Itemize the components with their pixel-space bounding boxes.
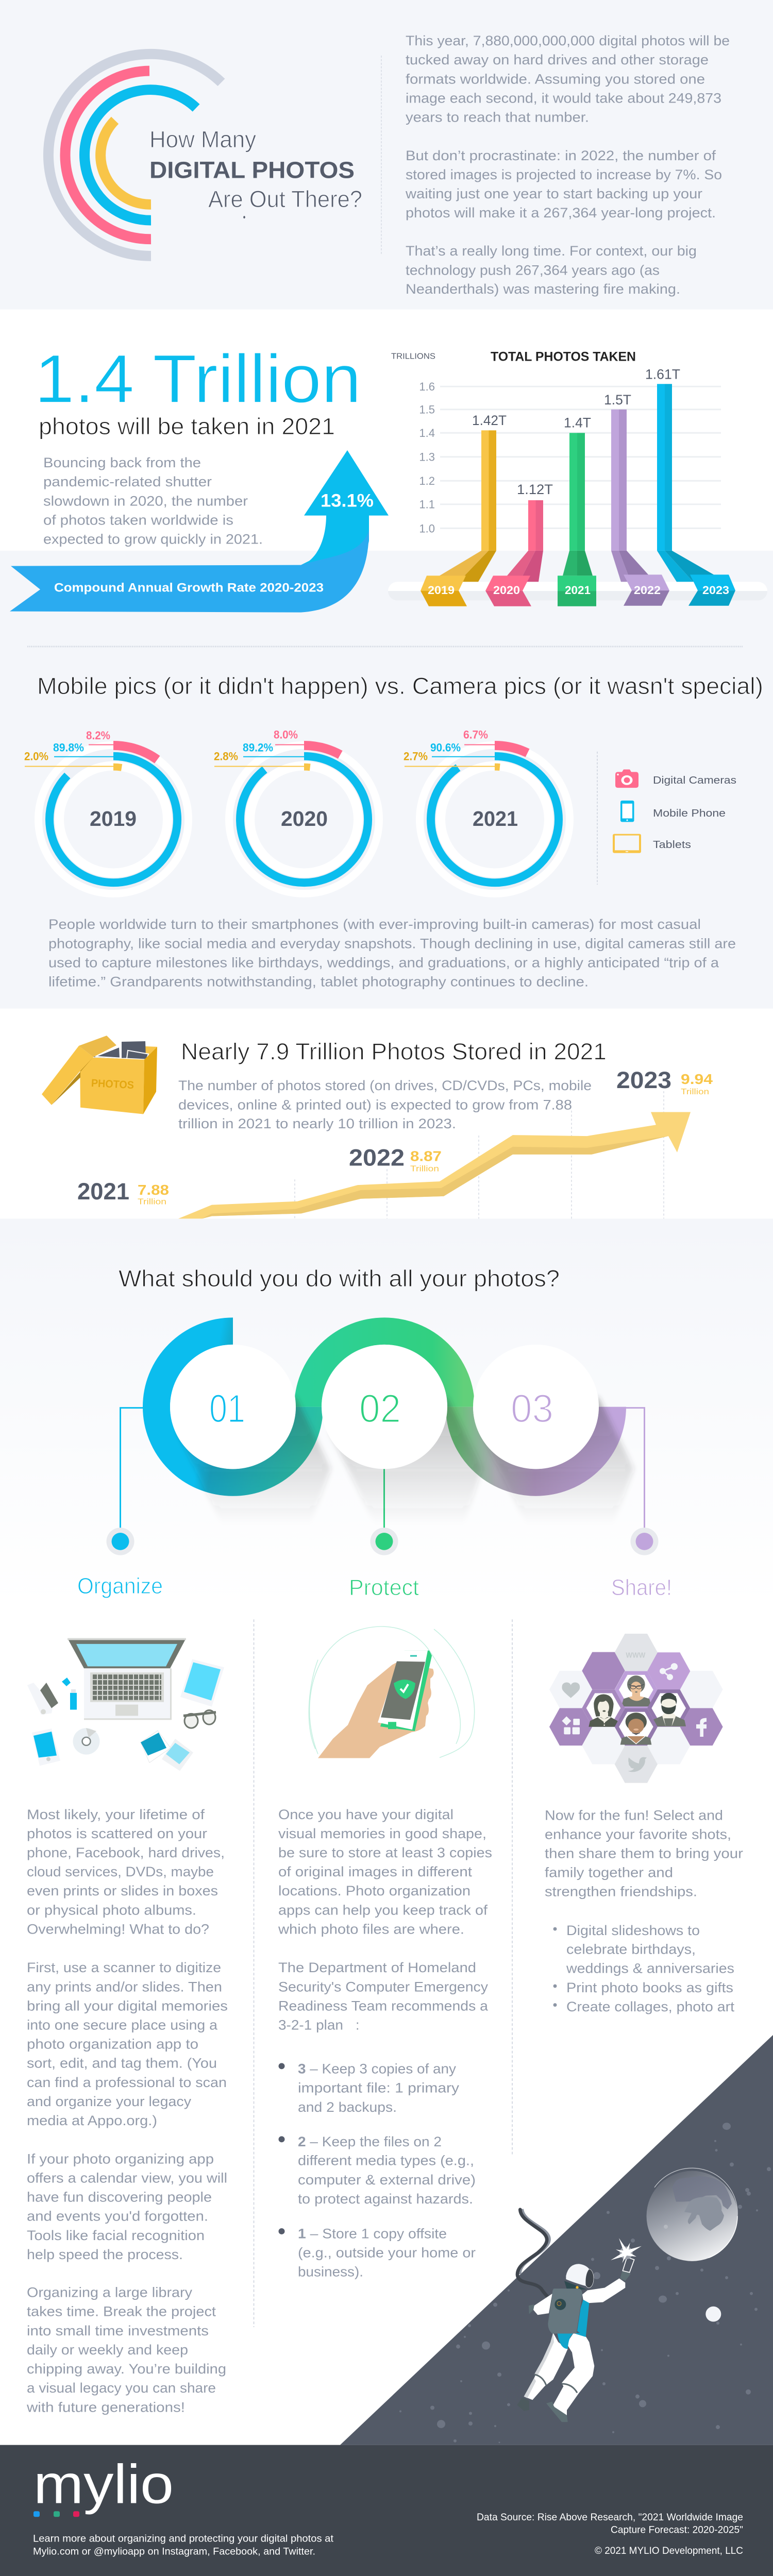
bar chart: total photos taken: TOTAL PHOTOS TAKEN (491, 350, 636, 364)
text block: organize: into one secure place using a (27, 2018, 217, 2032)
text block: protect: 3-2-1 plan (278, 2018, 343, 2032)
person: man center (615, 1708, 658, 1745)
text block: stored: devices, online & printed out) is expected to grow from 7.88 (178, 1097, 572, 1113)
text block: protect: of original images in different (278, 1864, 473, 1879)
hand (318, 1662, 434, 1758)
text block: intro paragraphs: technology push 267,364 years ago (as (406, 263, 660, 278)
icon: share hexagons (549, 1634, 723, 1783)
hex icons (562, 1652, 707, 1772)
bullet list: share ideas (553, 1923, 735, 2014)
text block: organize: or physical photo albums. (27, 1902, 196, 1918)
text block: share: then share them to bring your (545, 1846, 743, 1861)
text block: protect: visual memories in good shape, (278, 1826, 486, 1841)
text block: protect: The Department of Homeland (278, 1960, 476, 1975)
text block: rebound: of photos taken worldwide is (43, 513, 233, 528)
text block: organize: daily or weekly and keep (27, 2342, 188, 2358)
donut chart: 2021: 90.6% (430, 741, 461, 754)
bar chart: total photos taken: 1.1 (419, 498, 435, 511)
bar chart: total photos taken (388, 350, 767, 606)
bullet list: share ideas: Create collages, photo art (566, 1999, 735, 2014)
photo prints (141, 1731, 193, 1771)
bar chart: total photos taken: TRILLIONS (391, 352, 435, 361)
text block: share: family together and (545, 1865, 673, 1880)
label: 2023 value: 9.94 (681, 1071, 713, 1087)
panel: photos stored (42, 1036, 713, 1218)
bar: 2021: 1.4T (564, 415, 591, 430)
text block: organize: offers a calendar view, you will (27, 2171, 227, 2185)
text block: organize: takes time. Break the project (27, 2304, 216, 2319)
callout: 13.1 percent: 13.1% (321, 490, 374, 511)
text block: intro paragraphs: But don’t procrastinate: in 2022, the number of (406, 148, 716, 163)
text block: protect (278, 1807, 492, 2280)
text block: organize: Most likely, your lifetime of (27, 1807, 205, 1822)
bullet list: 3-2-1 plan: to protect against hazards. (298, 2191, 473, 2207)
icon: concentric arcs (48, 54, 221, 256)
text block: intro paragraphs: Neanderthals) was mastering fire making. (406, 281, 680, 297)
person: man with beard (647, 1689, 690, 1727)
bar: 2022: 2022 (634, 584, 661, 597)
bar: 2019 (421, 413, 507, 606)
footer (0, 2445, 773, 2576)
title: how many digital photos: How Many (149, 126, 256, 152)
label: 2021 value: 7.88 (138, 1182, 169, 1198)
text block: organize: into small time investments (27, 2323, 209, 2338)
bar chart: total photos taken: 1.5 (419, 403, 435, 416)
text block: protect: Once you have your digital (278, 1807, 453, 1822)
bar: 2019: 2019 (428, 584, 455, 597)
icon: camera (615, 769, 638, 788)
step 02 (322, 1345, 447, 1469)
heading: 1.4 trillion: 1.4 Trillion (35, 341, 361, 417)
text block: data source: Data Source: Rise Above Research, "2021 Worldwide Image (477, 2512, 743, 2523)
text block: organize: cloud services, DVDs, maybe (27, 1864, 214, 1879)
person: woman with glasses (615, 1671, 658, 1708)
legend: Tablets (653, 839, 691, 851)
heading: mobile vs camera: Mobile pics (or it didn't happen) vs. Camera pics (or it wasn't special) (37, 673, 763, 699)
icon: photo box: PHOTOS (91, 1077, 135, 1091)
text block: organize: First, use a scanner to digitize (27, 1960, 221, 1975)
bullet list: 3-2-1 plan: computer & external drive) (298, 2172, 476, 2188)
bar: 2020 (485, 482, 553, 606)
phone and flash (611, 2238, 642, 2273)
label: 2022 value: 2022 (349, 1145, 405, 1171)
legend: Mobile Phone (653, 807, 726, 819)
bullet list: 3-2-1 plan: important file: 1 primary (298, 2080, 460, 2096)
bullet list: 3-2-1 plan: 1 – Store 1 copy offsite (298, 2226, 447, 2241)
bullet list: 3-2-1 plan: different media types (e.g., (298, 2153, 474, 2168)
text block: organize: with future generations! (26, 2399, 185, 2415)
text block: rebound: slowdown in 2020, the number (43, 493, 248, 509)
phone (378, 1651, 432, 1731)
bar: 2022 (604, 392, 669, 606)
panel: intro header (48, 33, 730, 297)
heading: nearly 7.9 trillion: Nearly 7.9 Trillion Photos Stored in 2021 (181, 1039, 607, 1065)
donut chart: 2021: 2.7% (404, 750, 428, 763)
text block: mobile vs camera: photography, like social media and everyday snapshots. Though declining in use, digital cameras still are (48, 936, 736, 951)
arrow: growth (178, 1112, 691, 1218)
label: 2021 value (77, 1178, 169, 1207)
stars (399, 2123, 771, 2443)
text block: organize (26, 1807, 228, 2415)
text block: intro paragraphs: tucked away on hard drives and other storage (406, 52, 709, 67)
bar chart: total photos taken: 1.4 (419, 427, 435, 439)
label: 2022 value: Trillion (410, 1164, 439, 1173)
circle shadows (178, 1397, 634, 1524)
label: 2023 value (616, 1067, 713, 1096)
bullet list: 3-2-1 plan: 3 – Keep 3 copies of any (298, 2061, 457, 2077)
bar: 2023: 1.61T (645, 366, 680, 382)
text block: share: strengthen friendships. (545, 1884, 697, 1900)
text block: share: Now for the fun! Select and (545, 1807, 723, 1823)
panel: what should you do (77, 1265, 672, 1600)
text block: stored (178, 1078, 592, 1131)
text block: rebound: pandemic-related shutter (43, 474, 212, 489)
icon: photo box (42, 1036, 157, 1114)
text block: intro paragraphs: This year, 7,880,000,000,000 digital photos will be (406, 33, 730, 48)
bar: 2021 (558, 415, 596, 606)
text block: learn more: Mylio.com or @mylioapp on Instagram, Facebook, and Twitter. (33, 2546, 315, 2557)
donut chart: 2021: 6.7% (463, 728, 488, 741)
bar: 2020: 2020 (493, 584, 520, 597)
icon: protect phone (309, 1626, 475, 1758)
label: 2023 value: 2023 (616, 1067, 671, 1093)
text block: organize: a visual legacy you can share (27, 2380, 216, 2396)
text block: organize: sort, edit, and tag them. (You (27, 2056, 217, 2071)
bullet list: 3-2-1 plan: and 2 backups. (298, 2099, 397, 2115)
step 02: 02 (359, 1387, 401, 1431)
text block: data source: © 2021 MYLIO Development, LLC (595, 2545, 743, 2556)
text block: mobile vs camera: used to capture milestones like birthdays, weddings, and graduations, or a highly anticipated “trip of a (48, 955, 719, 970)
bar: 2020: 1.12T (517, 482, 553, 497)
helmet (564, 2281, 586, 2290)
donut chart: 2021: 2021 (473, 807, 518, 831)
backpack (548, 2289, 582, 2334)
connectors and dots (121, 1408, 644, 1535)
step 03: 03 (511, 1387, 553, 1431)
person: woman dark hair (582, 1689, 625, 1727)
illustration: space triangle (340, 2035, 773, 2445)
bar: 2021: 2021 (565, 584, 591, 597)
logo: mylio: mylio (33, 2453, 174, 2515)
donut chart: 2019: 8.2% (86, 729, 110, 742)
shield arcs (309, 1626, 475, 1758)
bar: 2023: 2023 (702, 584, 729, 597)
donut chart: 2019: 2019 (90, 807, 137, 831)
text block: intro paragraphs: image each second, it would take about 249,873 (406, 91, 721, 106)
bullet list: share ideas: Print photo books as gifts (566, 1980, 733, 1995)
phone (32, 1728, 60, 1766)
text block: organize: Organizing a large library (27, 2285, 193, 2300)
tablet (180, 1659, 224, 1707)
text block: learn more: Learn more about organizing and protecting your digital photos at (33, 2533, 333, 2545)
text block: data source (477, 2512, 743, 2556)
label: 2021 value: 2021 (77, 1178, 129, 1205)
text block: share: enhance your favorite shots, (545, 1827, 731, 1842)
text block: intro paragraphs: stored images is projected to increase by 7%. So (406, 167, 722, 182)
text block: rebound (43, 455, 263, 547)
text block: intro paragraphs: waiting just one year to start backing up your (405, 186, 702, 201)
text block: organize: and events you'd forgotten. (27, 2209, 208, 2224)
text block: organize: and organize your legacy (27, 2094, 192, 2109)
text block: organize: media at Appo.org.) (27, 2113, 157, 2128)
text block: organize: even prints or slides in boxes (27, 1883, 218, 1899)
donut chart: 2020: 8.0% (274, 728, 298, 741)
donut chart: 2020: 2.8% (214, 750, 238, 763)
text block: organize: have fun discovering people (27, 2190, 212, 2205)
text block: data source: Capture Forecast: 2020-2025" (611, 2524, 743, 2535)
bullet list: 3-2-1 plan: 2 – Keep the files on 2 (298, 2134, 442, 2149)
right arm (582, 2278, 625, 2303)
panel: mobile vs camera (24, 647, 763, 990)
camera and usb (27, 1677, 77, 1715)
bar chart: total photos taken: 1.0 (419, 522, 435, 535)
text block: mobile vs camera: lifetime.” Grandparents notwithstanding, tablet photography continues to decline. (48, 974, 589, 990)
text block: organize: If your photo organizing app (27, 2151, 214, 2166)
donut chart: 2020 (214, 728, 379, 893)
shield (394, 1680, 415, 1699)
text block: organize: chipping away. You’re building (27, 2361, 226, 2377)
text block: intro paragraphs: That’s a really long time. For context, our big (406, 243, 697, 259)
label: share: Share! (611, 1575, 672, 1600)
bullet list: share ideas: Digital slideshows to (566, 1923, 700, 1938)
text block: protect: Security's Computer Emergency (278, 1979, 489, 1994)
bullet list: 3-2-1 plan: (e.g., outside your home or (298, 2245, 476, 2260)
text block: organize: any prints and/or slides. Then (27, 1979, 222, 1994)
donut chart: 2019: 2.0% (24, 750, 48, 763)
label: organize: Organize (77, 1573, 163, 1599)
text block: organize: Tools like facial recognition (27, 2228, 205, 2243)
panel: 1.4 trillion photos taken (10, 341, 767, 613)
text block: learn more (33, 2533, 333, 2557)
text block: organize: phone, Facebook, hard drives, (27, 1845, 225, 1860)
moon (646, 2168, 738, 2261)
text block: intro paragraphs (405, 33, 730, 297)
text block: protect: : (356, 2018, 360, 2032)
donut chart: 2020: 89.2% (243, 741, 273, 754)
text block: organize: can find a professional to scan (27, 2075, 227, 2090)
label: 2021 value: Trillion (138, 1198, 166, 1207)
text block: intro paragraphs: years to reach that number. (406, 110, 589, 125)
legend (613, 769, 736, 853)
text block: stored: The number of photos stored (on drives, CD/CVDs, PCs, mobile (178, 1078, 592, 1093)
bar chart: total photos taken: 1.3 (419, 451, 435, 464)
icon: tablet (613, 834, 641, 853)
legs (524, 2333, 568, 2400)
small moon (705, 2307, 721, 2321)
laptop (68, 1638, 186, 1720)
arrow: growth ribbon (10, 450, 389, 613)
text block: intro paragraphs: formats worldwide. Assuming you stored one (406, 71, 705, 87)
donut chart: 2020: 2020 (281, 807, 328, 831)
label: compound annual growth rate: Compound Annual Growth Rate 2020-2023 (54, 581, 324, 595)
donut chart: 2019 (24, 729, 189, 893)
text block: protect: apps can help you keep track of (278, 1902, 488, 1918)
bar: 2022: 1.5T (604, 392, 631, 408)
text block: rebound: Bouncing back from the (43, 455, 201, 470)
hex icons: WWW (626, 1652, 646, 1660)
label: 2022 value (349, 1145, 442, 1173)
bullet list: share ideas: weddings & anniversaries (566, 1961, 734, 1976)
title: how many digital photos: DIGITAL PHOTOS (149, 157, 355, 183)
donut chart: 2021 (404, 728, 570, 893)
text block: organize: photo organization app to (27, 2037, 198, 2052)
donut chart: 2019: 89.8% (53, 741, 84, 754)
text block: stored: trillion in 2021 to nearly 10 trillion in 2023. (178, 1116, 456, 1131)
legend: Digital Cameras (653, 774, 736, 786)
label: protect: Protect (349, 1575, 419, 1600)
bullet list: 3-2-1 plan (278, 2061, 476, 2280)
bar chart: total photos taken: 1.2 (419, 474, 435, 487)
torso (577, 2300, 589, 2337)
heading: what should you do: What should you do with all your photos? (119, 1265, 560, 1292)
step 03 (473, 1345, 599, 1469)
icon: organize desk (27, 1638, 224, 1771)
text block: rebound: expected to grow quickly in 2021. (43, 532, 263, 547)
text block: protect: Readiness Team recommends a (278, 1998, 488, 2013)
text block: organize: help speed the process. (27, 2247, 183, 2262)
icon: mobile phone (620, 801, 634, 822)
text block: protect: which photo files are where. (278, 1922, 464, 1937)
step 01 (170, 1345, 296, 1469)
glasses (183, 1710, 216, 1728)
chain of arcs (156, 1331, 612, 1483)
label: 2022 value: 8.87 (410, 1148, 442, 1164)
text block: intro paragraphs: photos will make it a 267,364 year-long project. (406, 205, 716, 221)
cd (73, 1728, 100, 1755)
bullet list: share ideas: celebrate birthdays, (566, 1942, 696, 1957)
title: how many digital photos (149, 126, 362, 218)
bar chart: total photos taken: 1.6 (419, 380, 435, 393)
left arm (533, 2294, 552, 2315)
astronaut (517, 2209, 642, 2422)
text block: organize: bring all your digital memories (27, 1998, 228, 2013)
tube (388, 582, 767, 600)
title: how many digital photos: Are Out There? (208, 186, 362, 212)
subheading: photos will be taken in 2021 (39, 413, 335, 439)
text block: protect: locations. Photo organization (278, 1883, 470, 1899)
bar: 2019: 1.42T (472, 413, 507, 428)
bullet list: 3-2-1 plan: business). (298, 2264, 363, 2280)
text block: mobile vs camera (48, 917, 736, 990)
text block: mobile vs camera: People worldwide turn to their smartphones (with ever-improving built-in cameras) for most casual (48, 917, 701, 932)
label: 2023 value: Trillion (681, 1088, 709, 1096)
text block: protect: be sure to store at least 3 copies (278, 1845, 492, 1860)
text block: share (545, 1807, 743, 2014)
text block: organize: Overwhelming! What to do? (27, 1922, 209, 1937)
step 01: 01 (209, 1387, 245, 1431)
bar: 2023 (645, 366, 735, 606)
text block: organize: photos is scattered on your (27, 1826, 207, 1841)
